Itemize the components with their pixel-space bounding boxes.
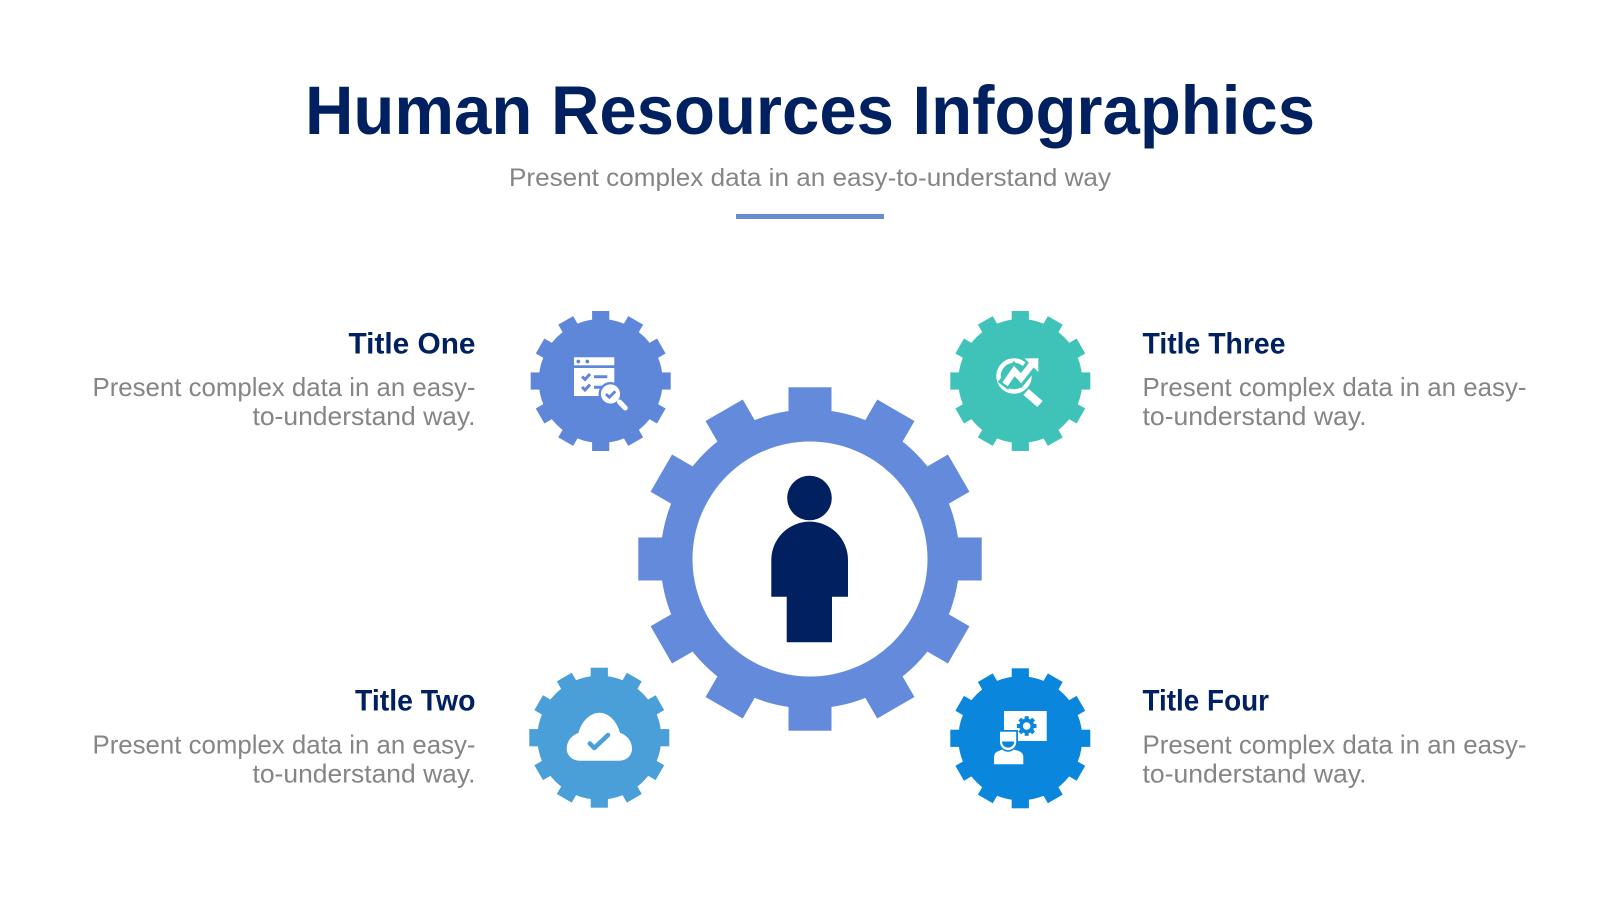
gear three — [950, 311, 1090, 451]
text block: title three — [1142, 328, 1526, 431]
text block: title four: Present complex data in an easy- — [1142, 730, 1526, 760]
text block: title three: Title Three — [1142, 328, 1286, 360]
text block: title four: Title Four — [1142, 684, 1269, 718]
title: Human Resources Infographics — [305, 72, 1315, 149]
central gear — [638, 387, 982, 731]
text block: title two — [92, 684, 476, 788]
text block: title two: Present complex data in an easy- — [92, 730, 476, 760]
gear four — [950, 668, 1090, 808]
icon: growth arrow with magnifier — [998, 358, 1040, 404]
icon: cloud with check — [567, 713, 632, 761]
text block: title four — [1142, 684, 1526, 788]
icon: person — [771, 476, 848, 642]
text block: title two: Title Two — [355, 684, 476, 718]
gear one — [531, 311, 671, 451]
text block: title three: Present complex data in an easy- — [1142, 372, 1526, 402]
text block: title one: Title One — [348, 328, 476, 360]
text block: title three: to-understand way. — [1142, 401, 1366, 431]
text block: title one: Present complex data in an easy- — [92, 372, 476, 402]
text block: title two: to-understand way. — [252, 758, 476, 788]
subtitle: Present complex data in an easy-to-understand way — [509, 164, 1112, 192]
gear two — [529, 668, 669, 808]
text block: title four: to-understand way. — [1142, 758, 1366, 788]
text block: title one — [92, 328, 476, 431]
text block: title one: to-understand way. — [252, 401, 476, 431]
icon: presenter with gear board — [994, 711, 1047, 764]
title underline — [736, 214, 884, 219]
icon: checklist with magnifier — [574, 357, 625, 408]
